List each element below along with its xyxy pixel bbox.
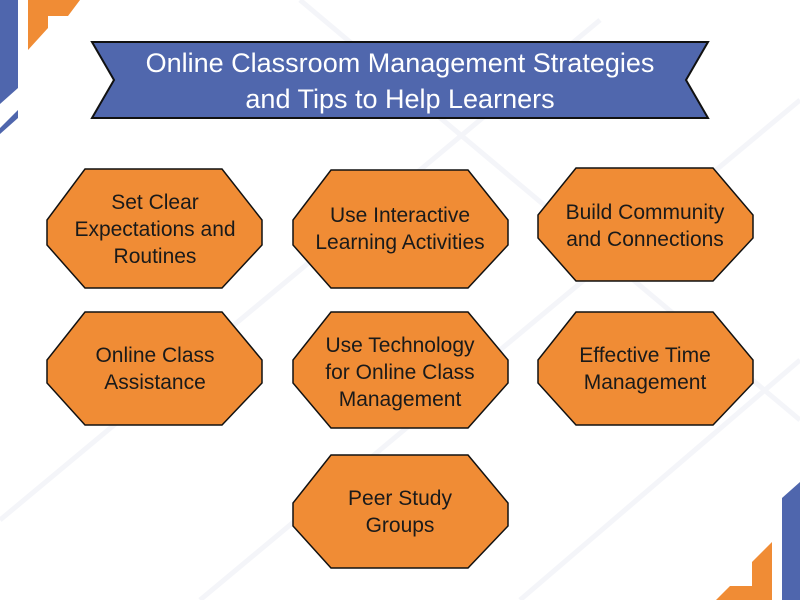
box: Set Clear Expectations and Routines: Set Clear: [111, 191, 199, 214]
box: Build Community and Connections: and Connections: [566, 228, 724, 251]
decoration: top-left corner: [0, 0, 80, 134]
box: Set Clear Expectations and Routines: Expectations and: [74, 218, 236, 241]
box: Online Class Assistance: [47, 312, 262, 425]
box: Peer Study Groups: Groups: [366, 514, 434, 537]
title banner: [92, 42, 708, 118]
box: Effective Time Management: Management: [584, 371, 706, 394]
box: Set Clear Expectations and Routines: Routines: [114, 245, 196, 268]
box: Use Technology for Online Class Management: Use Technology: [325, 334, 475, 357]
box: Use Interactive Learning Activities: Use Interactive: [330, 204, 470, 227]
title banner: and Tips to Help Learners: [245, 84, 555, 114]
title banner: Online Classroom Management Strategies: [146, 48, 654, 78]
box: Peer Study Groups: [293, 455, 508, 568]
box: Online Class Assistance: Assistance: [104, 371, 206, 394]
box: Peer Study Groups: Peer Study: [348, 487, 452, 510]
box: Set Clear Expectations and Routines: [47, 169, 262, 288]
box: Use Interactive Learning Activities: [293, 170, 508, 288]
box: Effective Time Management: Effective Time: [579, 344, 711, 367]
box: Use Technology for Online Class Management: for Online Class: [325, 361, 475, 384]
decoration: bottom-right corner: [716, 482, 800, 600]
box: Effective Time Management: [538, 312, 753, 425]
box: Build Community and Connections: [538, 168, 753, 281]
box: Use Interactive Learning Activities: Learning Activities: [315, 231, 485, 254]
box: Use Technology for Online Class Management: Management: [339, 388, 461, 411]
box: Build Community and Connections: Build Community: [566, 201, 725, 224]
box: Use Technology for Online Class Management: [293, 312, 508, 428]
box: Online Class Assistance: Online Class: [95, 344, 215, 367]
